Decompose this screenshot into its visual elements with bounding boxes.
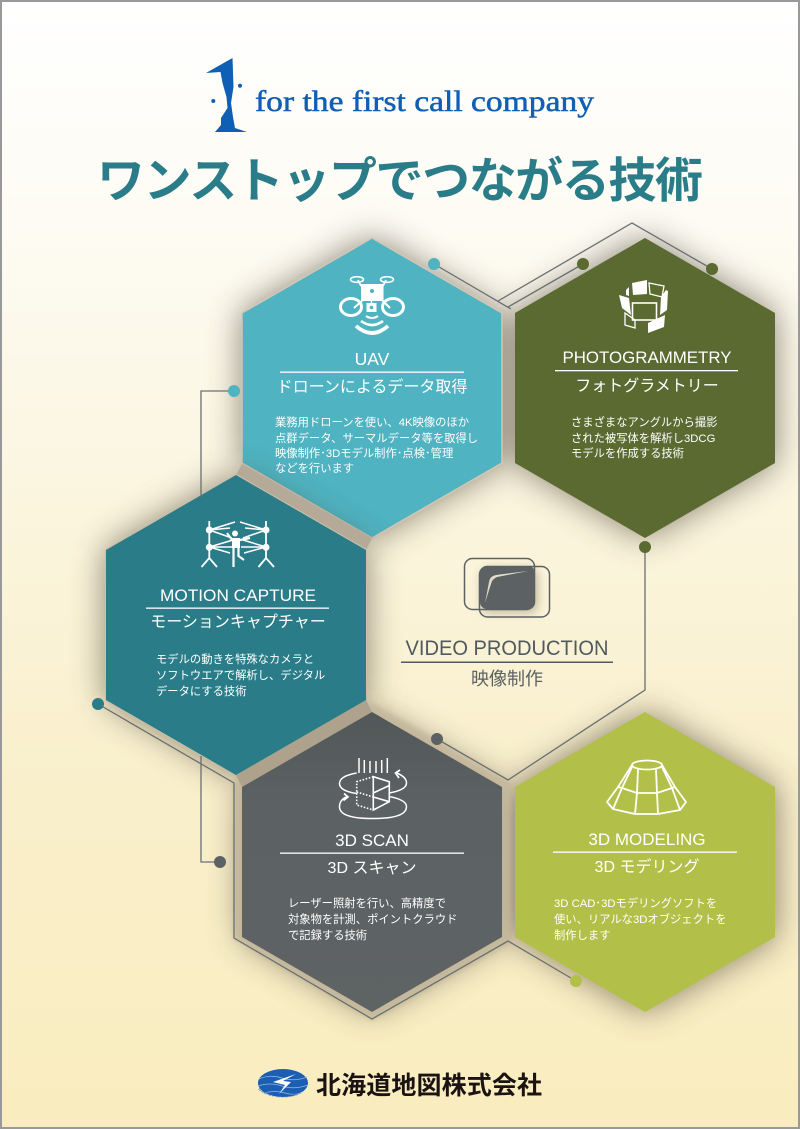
text: photogrammetry description: された被写体を解析し3DCG xyxy=(571,431,715,445)
text: motion capture description: データにする技術 xyxy=(156,684,246,698)
text: UAV description xyxy=(275,415,478,475)
text: UAV description: 業務用ドローンを使い、4K映像のほか xyxy=(275,415,469,429)
heading: 3D modeling: 3D MODELING xyxy=(588,830,706,849)
text: 3D modeling description xyxy=(554,896,726,942)
text: UAV description: 映像制作･3Dモデル制作･点検･管理 xyxy=(275,446,453,460)
company name: 北海道地図株式会社 xyxy=(316,1072,542,1100)
hexagon: photogrammetry xyxy=(515,238,775,538)
connector lines xyxy=(98,223,712,1019)
hexagon: motion capture xyxy=(106,475,366,775)
heading: video production: 映像制作 xyxy=(471,669,543,689)
tan band around 3D scan hexagon xyxy=(234,703,511,1020)
company logo mark: Mapping & Communications xyxy=(258,1088,301,1098)
text: 3D modeling description: 3D CAD･3Dモデリングソフトを xyxy=(554,896,717,910)
heading: UAV: UAV xyxy=(355,349,390,369)
icon: video production xyxy=(464,558,550,617)
text: 3D scan description: レーザー照射を行い、高精度で xyxy=(288,896,446,910)
hexagon: 3D scan xyxy=(242,712,502,1012)
band between motion capture and 3D scan hexagons xyxy=(236,700,372,787)
icon: 3D scan xyxy=(340,758,406,818)
heading: photogrammetry xyxy=(555,348,738,395)
re-drawn motion capture edge over its neighbours xyxy=(106,475,366,775)
heading: photogrammetry: PHOTOGRAMMETRY xyxy=(562,348,732,367)
text: UAV description: などを行います xyxy=(275,462,354,475)
heading: motion capture: MOTION CAPTURE xyxy=(160,586,316,605)
text: motion capture description: モデルの動きを特殊なカメラと xyxy=(156,652,314,666)
band between UAV and motion capture hexagons xyxy=(236,464,372,550)
text: 3D modeling description: 使い、リアルな3Dオブジェクトを xyxy=(554,912,726,926)
title: ワンストップでつながる技術 xyxy=(97,155,703,208)
text: motion capture description xyxy=(156,652,325,698)
text: 3D scan description: 対象物を計測、ポイントクラウド xyxy=(288,912,457,926)
company logo mark xyxy=(258,1069,308,1098)
icon: 3D modeling dome xyxy=(607,760,686,814)
text: 3D scan description xyxy=(288,896,457,942)
text: UAV description: 点群データ、サーマルデータ等を取得し xyxy=(275,431,478,445)
heading: video production: VIDEO PRODUCTION xyxy=(406,637,608,660)
heading: video production xyxy=(401,637,613,689)
heading: 3D modeling xyxy=(553,830,737,876)
heading: 3D scan xyxy=(280,831,464,877)
heading: motion capture xyxy=(146,586,329,631)
text: 3D scan description: で記録する技術 xyxy=(288,928,367,942)
logo mark: numeral one xyxy=(206,58,247,132)
text: photogrammetry description: さまざまなアングルから撮影 xyxy=(571,415,717,429)
text: photogrammetry description: モデルを作成する技術 xyxy=(571,446,684,460)
heading: 3D modeling: 3D モデリング xyxy=(595,857,699,876)
icon: photogrammetry xyxy=(619,280,668,333)
heading: 3D scan: 3D SCAN xyxy=(335,831,409,850)
heading: UAV xyxy=(277,349,467,396)
tagline: for the first call company xyxy=(255,85,594,118)
text: motion capture description: ソフトウエアで解析し、デジタル xyxy=(156,668,325,682)
icon: drone xyxy=(340,277,404,333)
heading: motion capture: モーションキャプチャー xyxy=(150,613,326,631)
soft shadow behind motion capture hexagon xyxy=(106,475,366,775)
connector dots xyxy=(92,258,718,987)
soft shadow behind UAV and photogrammetry hexagons xyxy=(242,238,775,538)
soft shadow behind lower hexagons xyxy=(242,712,775,1012)
hexagon: UAV xyxy=(242,238,502,538)
hexagon: 3D modeling xyxy=(515,712,775,1012)
text: photogrammetry description xyxy=(571,415,717,460)
icon: motion capture rig xyxy=(202,521,274,567)
text: 3D modeling description: 制作します xyxy=(554,929,610,942)
heading: 3D scan: 3D スキャン xyxy=(328,860,416,877)
heading: photogrammetry: フォトグラメトリー xyxy=(575,377,719,395)
heading: UAV: ドローンによるデータ取得 xyxy=(277,377,467,396)
